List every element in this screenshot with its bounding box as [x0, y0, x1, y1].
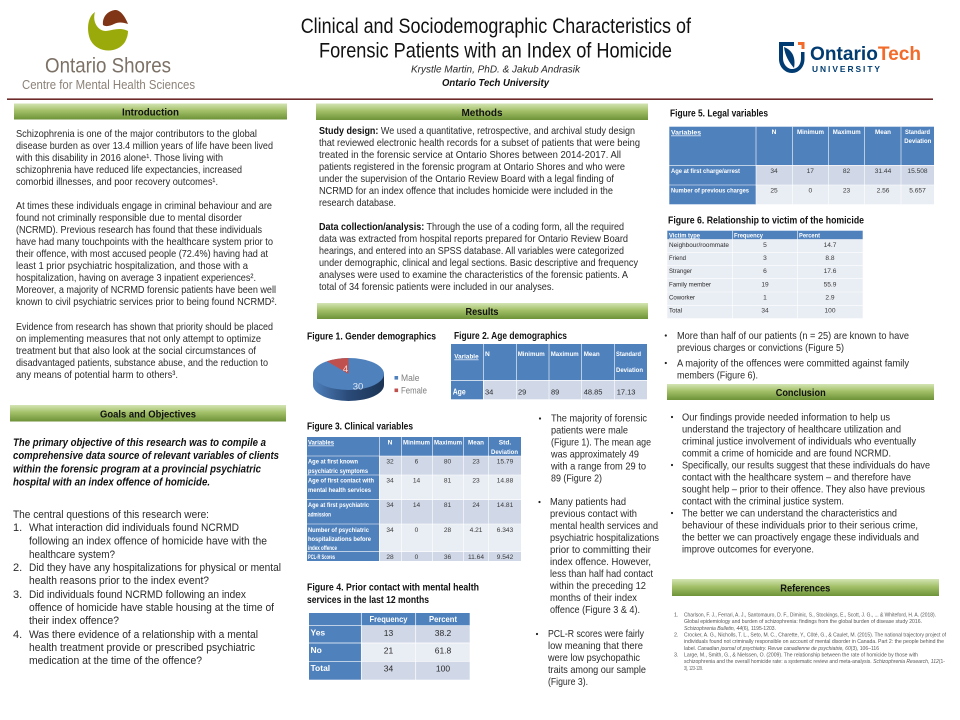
text block: central questions: What interaction did individuals found NCRMD — [29, 522, 239, 534]
table: relationship to victim: 8.8 — [825, 255, 835, 262]
table: clinical variables: 28 — [444, 527, 451, 534]
figure 6 title: Figure 6. Relationship to victim of the homicide — [668, 216, 864, 226]
table: relationship to victim: 55.9 — [824, 281, 837, 288]
text block: introduction: found not criminally responsible due to mental disorder — [16, 213, 243, 224]
table: legal variables: Standard — [905, 129, 930, 136]
heading: Conclusion: Conclusion — [776, 387, 826, 399]
table: clinical variables: 14 — [413, 478, 420, 484]
table: prior contact: 38.2 — [435, 628, 452, 638]
table: legal variables — [669, 127, 934, 204]
table: age demographics: 29 — [518, 388, 526, 396]
pie chart: gender demographics: Male — [401, 373, 420, 383]
table: clinical variables: psychiatric symptoms — [308, 468, 368, 475]
table: relationship to victim: 2.9 — [825, 294, 835, 301]
text block: conclusion: Specifically, our results suggest that these individuals do have — [682, 460, 930, 472]
text block: introduction: on implementing measures that not only attempt to optimize — [16, 334, 261, 345]
table: relationship to victim: 34 — [761, 308, 769, 315]
table: legal variables: N — [772, 129, 777, 136]
text block: introduction: Evidence from research has shown that priority should be placed — [16, 322, 273, 333]
table: relationship to victim: Victim type — [669, 232, 700, 240]
text block: introduction: Schizophrenia is one of the major contributors to the global — [16, 129, 257, 140]
table: relationship to victim: Family member — [669, 281, 712, 288]
text block: introduction: treatment but that also look at the social circumstances of — [16, 346, 256, 357]
text block: references: label. Canadian journal of psychiatry. Revue canadienne de psychiatrie, 60(3), 106–116 — [684, 646, 879, 652]
table: clinical variables: 6 — [415, 458, 419, 466]
table: clinical variables: 4.21 — [470, 527, 483, 534]
table: legal variables: 15.508 — [907, 168, 928, 175]
text block: introduction: Moreover, a majority of NCRMD forensic patients have been well — [16, 285, 276, 296]
table: prior contact: 34 — [384, 664, 393, 674]
table: clinical variables: 15.79 — [497, 458, 514, 466]
table: clinical variables — [307, 437, 521, 561]
text block: results bullets: (Figure 3). — [548, 677, 588, 688]
table: clinical variables: 6.343 — [497, 527, 514, 534]
table: legal variables: 17 — [807, 168, 814, 175]
text block: introduction: (NCRMD). Previous research has found that these individuals — [16, 225, 262, 236]
text block: introduction: disease burden as over 13.4 million years of life have been lived — [16, 141, 273, 152]
authors: Krystle Martin, PhD. & Jakub Andrasik — [411, 64, 581, 76]
text block: methods — [319, 126, 640, 293]
text block: results bullets: were low psychopathic — [547, 653, 640, 664]
text block: conclusion: behaviour of these individuals prior to their serious crime, — [682, 520, 918, 532]
table: prior contact: Percent — [429, 614, 457, 624]
table: age demographics: Minimum — [518, 351, 545, 358]
text block: results bullets: with a range from 29 to — [550, 462, 646, 472]
figure 3 title: Figure 3. Clinical variables — [307, 422, 413, 432]
text block: results bullets: prior to committing their — [550, 545, 652, 556]
heading: Introduction: Introduction — [122, 106, 179, 118]
text block: conclusion — [671, 412, 930, 556]
table: clinical variables: Deviation — [491, 449, 518, 456]
heading: Results — [317, 303, 648, 319]
text block: central questions — [13, 509, 281, 667]
table: relationship to victim: Coworker — [669, 294, 696, 301]
table: clinical variables: 9.542 — [497, 554, 514, 561]
table: prior contact: Yes — [310, 628, 325, 638]
text block: primary objective: hospital with an index offence of homicide. — [13, 476, 210, 488]
text block: references: 2. — [674, 632, 678, 638]
text block: results bullets: The majority of forensic — [551, 414, 647, 424]
text block: introduction: schizophrenia have reduced life expectancies, increased — [16, 165, 242, 176]
logo: Ontario Tech University: UNIVERSITY — [812, 64, 880, 74]
text block: central questions: 1. — [13, 522, 22, 534]
table: prior contact: 100 — [436, 664, 450, 674]
table: prior contact: 13 — [384, 628, 393, 638]
figure 1 title: Figure 1. Gender demographics — [307, 332, 436, 342]
text block: central questions: offence of homicide have stable housing at the time of — [29, 602, 275, 614]
heading: References: References — [780, 582, 830, 594]
table: clinical variables: Age at first psychiatric — [308, 502, 369, 509]
table: prior contact — [309, 613, 470, 680]
table: legal variables: Mean — [875, 129, 891, 136]
pie chart: gender demographics: 4 — [343, 364, 348, 375]
text block: results bullets: traits among our sample — [548, 665, 646, 676]
text block: references: individuals found not criminally responsible on account of mental disorder in Canada. Part 2: the people behind the — [684, 639, 944, 645]
text block: legal and victim bullets: A majority of the offences were committed against family — [677, 358, 910, 370]
text block: introduction — [15, 129, 277, 381]
title — [301, 15, 691, 62]
text block: results bullets: less than half had contact — [550, 569, 653, 580]
text block: results bullets: was approximately 49 — [550, 450, 639, 460]
table: legal variables: 0 — [808, 188, 812, 194]
text block: introduction: comorbid illnesses, and poor recovery outcomes¹. — [16, 177, 218, 188]
table: prior contact: No — [310, 645, 322, 655]
text block: methods: hearings, and entered into an SPSS database. All variables were categorized — [319, 246, 624, 257]
table: prior contact: Frequency — [370, 614, 408, 624]
table: relationship to victim: 3 — [763, 255, 767, 262]
table: clinical variables: 80 — [444, 458, 451, 466]
heading: Methods: Methods — [462, 107, 503, 119]
table: relationship to victim — [667, 231, 863, 318]
authors — [411, 64, 581, 89]
pie chart: gender demographics: Female — [401, 386, 427, 396]
table: clinical variables: 0 — [415, 554, 419, 561]
figure 4 title: services in the last 12 months — [307, 595, 429, 606]
text block: primary objective: The primary objective of this research was to compile a — [13, 437, 266, 449]
table: clinical variables: Age at first known — [308, 458, 358, 466]
text block: results bullets: mental health services and — [550, 521, 658, 532]
table: clinical variables: 14 — [413, 502, 420, 509]
table: relationship to victim: Neighbour/roommate — [669, 242, 729, 249]
heading: Methods — [316, 104, 648, 120]
title: Clinical and Sociodemographic Characteristics of — [301, 15, 691, 38]
table: clinical variables: index offence — [308, 545, 337, 552]
text block: central questions: 2. — [13, 562, 22, 574]
table: legal variables: 25 — [770, 188, 778, 194]
table: clinical variables: Age of first contact with — [308, 478, 374, 484]
logo: Ontario Shores — [22, 10, 195, 92]
text block: results bullets: (Figure 1). The mean age — [551, 438, 651, 448]
table: legal variables: 82 — [843, 168, 850, 175]
table: clinical variables: admission — [308, 512, 331, 518]
table: clinical variables: Minimum — [403, 440, 430, 446]
table: age demographics: 89 — [551, 388, 559, 396]
text block: references: Crocker, A. G., Nicholls, T. L., Seto, M. C., Charette, Y., Côté, G., & Caulet, M. (2015). The national trajectory project of — [684, 632, 946, 638]
table: clinical variables: Number of psychiatric — [308, 527, 369, 534]
text block: references: Charlson, F. J., Ferrari, A. J., Santomauro, D. F., Diminic, S., Stockings, E., Scott, J. G., ... & Whiteford, H. A. (2018). — [684, 612, 936, 618]
text block: conclusion: contact with the healthcare system – and therefore have — [682, 472, 911, 484]
text block: references: Schizophrenia Bulletin, 44(6), 1195-1203. — [684, 626, 776, 632]
text block: results bullets — [536, 414, 659, 688]
table: clinical variables: 36 — [444, 554, 451, 561]
text block: conclusion: Our findings provide needed information to help us — [682, 412, 890, 424]
text block: legal and victim bullets: More than half of our patients (n = 25) are known to have — [677, 331, 909, 342]
text block: primary objective: within the forensic program at a provincial psychiatric — [13, 464, 261, 476]
text block: methods: NCRMD for an index offence that includes homicide were included in the — [319, 186, 613, 197]
text block: methods: analyses were used to examine the characteristics of the forensic patients. A — [319, 270, 628, 281]
table: relationship to victim: Friend — [669, 255, 686, 262]
table: legal variables: Age at first charge/arrest — [671, 168, 741, 175]
text block: results bullets: within the preceding 12 — [549, 581, 646, 592]
text block: methods: that reviewed electronic health records for a subset of patients that were being — [319, 138, 640, 149]
table: clinical variables: 34 — [386, 527, 394, 534]
text block: results bullets: patients were male — [551, 426, 628, 436]
text block: methods: research database. — [319, 198, 396, 209]
table: clinical variables: 23 — [472, 458, 480, 466]
table: clinical variables: 23 — [472, 478, 480, 484]
heading: Conclusion — [667, 384, 934, 400]
table: relationship to victim: 17.6 — [824, 268, 837, 275]
text block: primary objective: comprehensive data source of relevant variables of clients — [13, 450, 279, 462]
table: relationship to victim: Total — [669, 308, 682, 315]
text block: introduction: with this disability in 2016 alone¹. Those living with — [15, 153, 223, 164]
logo: Ontario Tech University — [779, 42, 921, 74]
text block: legal and victim bullets: members (Figure 6). — [677, 370, 758, 382]
table: age demographics: N — [485, 351, 490, 358]
logo: Ontario Shores: Ontario Shores — [45, 54, 171, 78]
table: age demographics: Age — [453, 388, 466, 396]
text block: methods: under demographic, clinical and legal sections. Basic descriptive and frequency — [319, 258, 639, 269]
text block: results bullets: psychiatric hospitalizations — [550, 533, 659, 544]
table: relationship to victim: 14.7 — [824, 242, 837, 249]
heading: Introduction — [14, 104, 287, 120]
table: legal variables: Number of previous charges — [671, 188, 749, 194]
text block: results bullets: previous contact with — [550, 509, 637, 520]
text block: results bullets: PCL-R scores were fairly — [548, 629, 645, 640]
text block: conclusion: understand the trajectory of healthcare utilization and — [682, 424, 901, 436]
table: relationship to victim: 6 — [763, 268, 767, 275]
text block: central questions: medication at the time of the offence? — [29, 655, 202, 667]
text block: methods: Data collection/analysis: Through the use of a coding form, all the required — [319, 222, 624, 233]
table: clinical variables: 34 — [386, 478, 394, 484]
text block: conclusion: commit a crime of homicide and are found NCRMD. — [682, 448, 891, 460]
heading: Results: Results — [466, 306, 499, 318]
text block: results bullets: index offence. However, — [550, 557, 651, 568]
figure 4 title — [307, 582, 479, 606]
table: age demographics: 48.85 — [584, 388, 602, 396]
table: legal variables: 31.44 — [875, 168, 892, 175]
text block: central questions: their index offence? — [29, 615, 119, 627]
text block: methods: data was extracted from hospital reports prepared for Ontario Review Board — [319, 234, 628, 245]
text block: central questions: following an index offence of homicide have with the — [29, 536, 267, 548]
table: clinical variables: Maximum — [434, 440, 462, 446]
text block: methods: Study design: We used a quantitative, retrospective, and archival study design — [319, 126, 635, 137]
text block: central questions: health reasons prior to the index event? — [29, 575, 209, 587]
heading: Goals and Objectives — [10, 405, 286, 422]
table: clinical variables: 34 — [386, 502, 394, 509]
text block: introduction: hospitalization, having on average 3 inpatient experiences². — [16, 273, 256, 284]
heading: References — [672, 579, 939, 596]
text block: conclusion: contact with the criminal justice system. — [682, 496, 844, 508]
table: clinical variables: PCL-R Scores — [308, 554, 335, 561]
text block: conclusion: the better we can proactively engage these individuals and — [682, 532, 919, 544]
text block: references: Large, M., Smith, G., & Nielssen, O. (2009). The relationship between the rate of homicide by those with — [684, 652, 918, 658]
text block: conclusion: criminal justice involvement of individuals who eventually — [682, 436, 917, 448]
table: age demographics: 34 — [485, 388, 493, 396]
table: clinical variables: 14.88 — [497, 478, 514, 484]
text block: results bullets: low meaning that there — [548, 641, 643, 652]
text block: references: Global epidemiology and burden of schizophrenia: findings from the global burden of disease study 2016. — [684, 619, 922, 625]
table: clinical variables: Variables — [308, 440, 334, 446]
text block: conclusion: improve outcomes for everyone. — [682, 544, 814, 556]
table: prior contact: 61.8 — [435, 646, 452, 656]
table: age demographics — [451, 344, 647, 399]
table: legal variables: Maximum — [833, 129, 861, 136]
table: prior contact: Total — [310, 663, 330, 673]
text block: methods: total of 34 forensic patients were included in our analyses. — [319, 282, 554, 293]
text block: central questions: healthcare system? — [29, 549, 115, 561]
text block: central questions: The central questions of this research were: — [13, 509, 209, 521]
pie chart: gender demographics: 30 — [353, 382, 363, 392]
text block: introduction: have had many touchpoints with the healthcare system prior to — [16, 237, 273, 248]
table: age demographics: Mean — [584, 351, 600, 358]
table: age demographics: 17.13 — [617, 388, 635, 396]
table: legal variables: 34 — [770, 168, 778, 175]
text block: methods: under the supervision of the Ontario Review Board with a legal finding of — [319, 174, 614, 185]
text block: introduction: known to civil psychiatric services prior to being found NCRMD². — [16, 297, 277, 308]
table: clinical variables: Mean — [468, 440, 484, 446]
figure 5 title: Figure 5. Legal variables — [670, 108, 768, 120]
table: clinical variables: 28 — [386, 554, 394, 561]
table: age demographics: Variable — [454, 354, 479, 360]
text block: introduction: disadvantaged patients, substance abuse, and the reduction to — [16, 358, 268, 369]
table: relationship to victim: 19 — [761, 281, 769, 288]
text block: references: 3. — [674, 652, 678, 658]
text block: introduction: their offence, with most accused people (72.4%) having had at — [16, 249, 268, 260]
text block: introduction: At times these individuals engage in criminal behaviour and are — [16, 201, 272, 212]
figure 2 title: Figure 2. Age demographics — [454, 331, 567, 342]
table: legal variables: 23 — [843, 188, 850, 194]
figure 4 title: Figure 4. Prior contact with mental health — [307, 582, 479, 594]
text block: references — [674, 612, 946, 672]
table: relationship to victim: Frequency — [734, 232, 763, 240]
heading: Goals and Objectives: Goals and Objectives — [100, 408, 196, 420]
table: clinical variables: Std. — [499, 440, 511, 446]
table: clinical variables: 81 — [444, 478, 451, 484]
text block: references: schizophrenia and the overall homicide rate: a systematic review and meta-analysis. Schizophrenia Research, 112(1- — [684, 659, 945, 665]
table: legal variables: 2.56 — [877, 188, 890, 194]
table: clinical variables: N — [388, 440, 393, 446]
table: prior contact: 21 — [384, 646, 393, 656]
table: legal variables: Minimum — [797, 129, 824, 136]
text block: central questions: Did they have any hospitalizations for physical or mental — [29, 562, 281, 574]
text block: conclusion: The better we can understand the characteristics and — [682, 508, 897, 520]
pie chart: gender demographics — [313, 358, 427, 401]
table: clinical variables: 24 — [472, 502, 480, 509]
authors: Ontario Tech University — [442, 78, 550, 89]
table: clinical variables: mental health services — [308, 487, 371, 494]
table: relationship to victim: 1 — [763, 294, 767, 301]
text block: results bullets: Many patients had — [550, 497, 626, 508]
text block: results bullets: 89 (Figure 2) — [551, 474, 602, 484]
text block: central questions: 3. — [13, 589, 22, 601]
text block: conclusion: sought help – prior to their offence. They also have previous — [682, 484, 925, 496]
text block: primary objective — [13, 437, 279, 488]
text block: results bullets: offence (Figure 3 & 4). — [550, 605, 640, 616]
text block: methods: treated in the forensic service at Ontario Shores between 2014-2017. All — [319, 150, 621, 161]
text block: central questions: Did individuals found NCRMD following an index — [29, 589, 246, 601]
table: legal variables: Deviation — [904, 138, 931, 145]
table: age demographics: Standard — [616, 351, 641, 358]
text block: references: 3), 123-129. — [684, 666, 703, 672]
title: Forensic Patients with an Index of Homicide — [319, 40, 672, 62]
table: age demographics: Maximum — [551, 351, 579, 358]
text block: central questions: health treatment provide or prescribed psychiatric — [29, 642, 255, 654]
table: clinical variables: hospitalizations before — [308, 536, 371, 543]
text block: central questions: Was there evidence of a relationship with a mental — [29, 629, 258, 641]
table: age demographics: Deviation — [616, 367, 643, 374]
table: clinical variables: 32 — [386, 458, 394, 466]
table: clinical variables: 0 — [415, 527, 419, 534]
text block: references: 1. — [674, 612, 678, 618]
text block: central questions: 4. — [13, 629, 22, 641]
logo: Ontario Tech University: OntarioTech — [810, 43, 921, 65]
table: relationship to victim: Stranger — [669, 268, 693, 275]
text block: introduction: any means of potential harm to others³. — [16, 370, 178, 381]
text block: results bullets: months of their index — [550, 593, 637, 604]
table: relationship to victim: 100 — [824, 308, 836, 315]
table: relationship to victim: 5 — [763, 242, 767, 249]
text block: methods: patients registered in the forensic program at Ontario Shores and who were — [319, 162, 625, 173]
text block: legal and victim bullets: previous charges or convictions (Figure 5) — [677, 343, 844, 354]
table: relationship to victim: Percent — [799, 232, 821, 240]
table: clinical variables: 14.81 — [497, 502, 514, 509]
text block: introduction: least 1 prior psychiatric hospitalization, and those with a — [16, 261, 248, 272]
table: clinical variables: 11.64 — [468, 554, 484, 561]
table: legal variables: Variables — [671, 130, 701, 136]
table: clinical variables: 81 — [444, 502, 451, 509]
text block: legal and victim bullets — [665, 331, 910, 382]
logo: Ontario Shores: Centre for Mental Health Sciences — [22, 77, 195, 92]
table: legal variables: 5.657 — [909, 188, 926, 194]
